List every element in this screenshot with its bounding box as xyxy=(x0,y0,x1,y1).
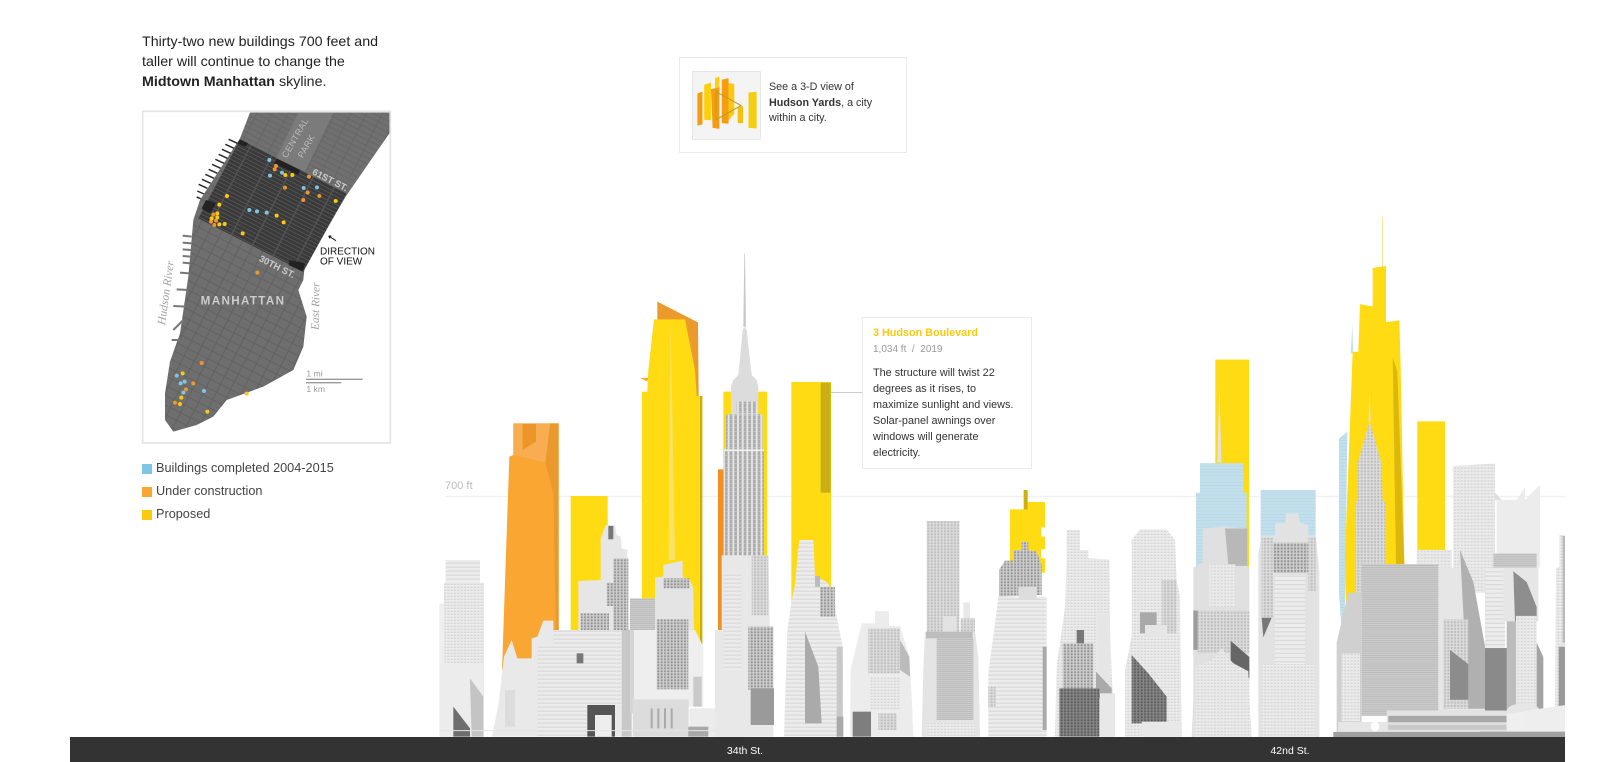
callout body: degrees as it rises, to xyxy=(873,383,976,395)
locator map xyxy=(142,110,392,444)
intro text xyxy=(142,34,378,90)
street bar xyxy=(70,737,1565,762)
callout height and year: 1,034 ft / 2019 xyxy=(873,344,942,355)
map dots: completed xyxy=(175,158,319,395)
label: 42nd St.: 42nd St. xyxy=(1270,745,1310,757)
callout body xyxy=(873,367,1013,459)
island of Manhattan xyxy=(165,113,389,432)
map dots: under construction xyxy=(173,164,321,405)
skyline chart xyxy=(70,217,1565,762)
map labels: CENTRAL xyxy=(280,116,311,160)
promo text: See a 3-D view of xyxy=(769,81,854,93)
callout title: 3 Hudson Boulevard xyxy=(873,327,978,339)
grey existing buildings xyxy=(439,253,1600,737)
map labels: DIRECTION xyxy=(320,246,375,257)
buildings west of 34th St. xyxy=(439,253,774,737)
legend: completed: Buildings completed 2004-2015 xyxy=(156,461,334,475)
promo thumbnail xyxy=(692,71,761,140)
promo text xyxy=(769,81,872,124)
callout body: maximize sunlight and views. xyxy=(873,399,1013,411)
label: 34th St.: 34th St. xyxy=(727,745,763,757)
intro text: Midtown Manhattan skyline. xyxy=(142,74,326,90)
map labels: Hudson River xyxy=(155,260,177,327)
map labels: 1 mi xyxy=(306,368,323,378)
blue buildings xyxy=(1196,325,1353,632)
map dots: proposed xyxy=(178,173,338,414)
700 ft reference line: 700 ft xyxy=(445,480,473,492)
legend: proposed: Proposed xyxy=(156,507,210,521)
map labels: 1 km xyxy=(306,384,325,394)
callout body: Solar-panel awnings over xyxy=(873,415,995,427)
buildings around 42nd St. xyxy=(1192,387,1600,737)
yellow tower behind blue xyxy=(1215,360,1249,570)
intro text: Thirty-two new buildings 700 feet and xyxy=(142,34,378,50)
yellow tower west xyxy=(571,496,608,636)
towers behind Empire State xyxy=(718,392,767,633)
coloured towers xyxy=(502,217,1445,670)
legend: under construction: Under construction xyxy=(156,484,262,498)
map labels: PARK xyxy=(296,133,317,160)
callout body: electricity. xyxy=(873,447,920,459)
legend xyxy=(142,461,334,521)
orange tower xyxy=(502,423,559,670)
promo text: within a city. xyxy=(769,112,827,124)
twisted tower with orange tower behind xyxy=(640,302,702,645)
Hudson Boulevard front buildings and midtown group xyxy=(784,521,1182,737)
callout: 3 Hudson Boulevard xyxy=(862,317,1032,469)
callout connector xyxy=(831,392,862,394)
map labels xyxy=(155,116,375,394)
map labels: 30TH ST. xyxy=(257,254,297,280)
easternmost buildings xyxy=(1480,535,1566,737)
map labels: OF VIEW xyxy=(320,257,363,268)
promo text: Hudson Yards, a city xyxy=(769,97,872,109)
map labels: MANHATTAN xyxy=(201,295,285,308)
map labels: East River xyxy=(310,282,323,331)
yellow tower centre xyxy=(1010,490,1045,573)
yellow tower east xyxy=(1417,421,1445,552)
3 Hudson Boulevard tower xyxy=(791,382,831,649)
callout body: windows will generate xyxy=(873,431,978,443)
promo box: Hudson Yards xyxy=(679,57,907,153)
intro text: taller will continue to change the xyxy=(142,54,345,70)
tallest yellow tower xyxy=(1345,217,1404,609)
callout body: The structure will twist 22 xyxy=(873,367,995,379)
map labels: 61ST ST. xyxy=(311,167,349,193)
